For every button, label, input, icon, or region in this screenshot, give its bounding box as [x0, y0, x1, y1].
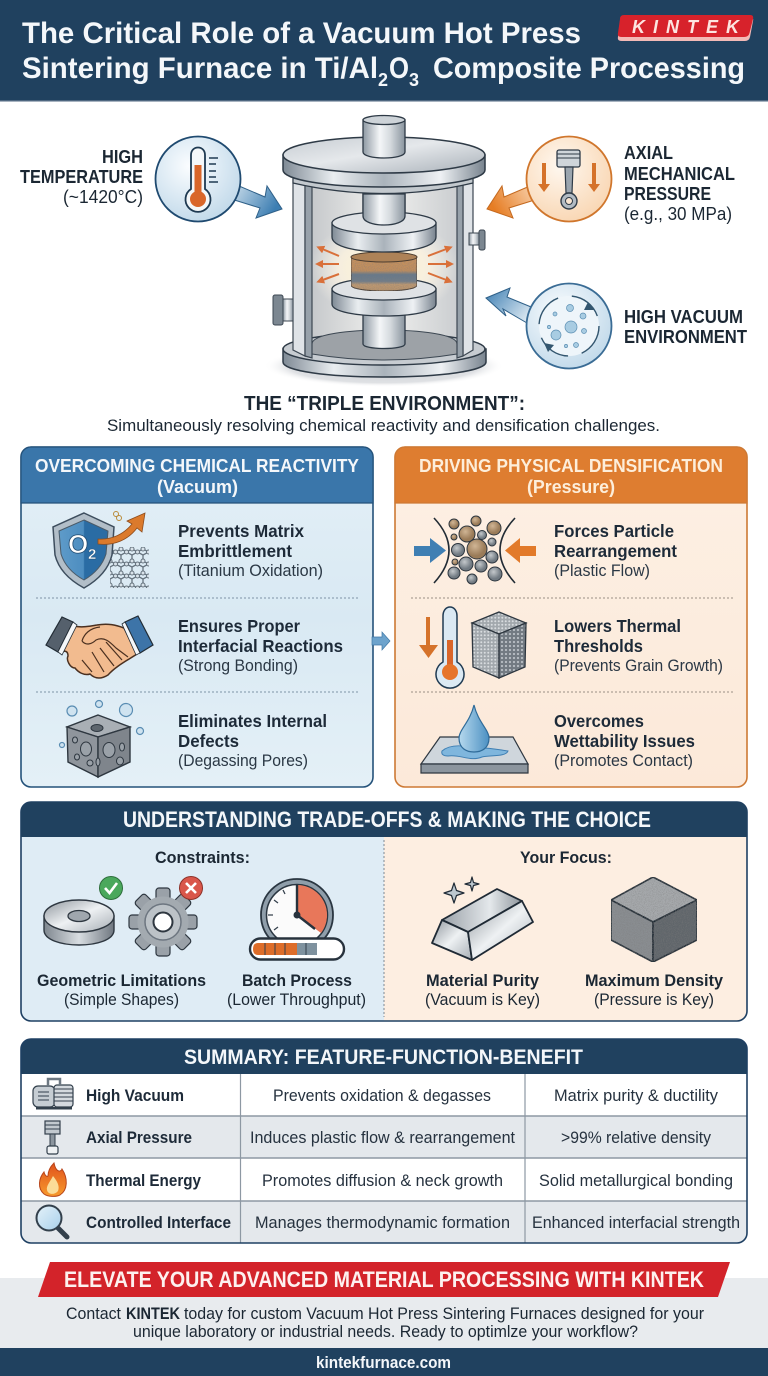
base plate	[283, 330, 486, 377]
table row: axial pressure	[86, 1128, 712, 1147]
title: 3	[409, 70, 419, 90]
label: axial mechanical pressure: AXIAL	[624, 142, 673, 163]
labels: trade-offs items: Geometric Limitations	[37, 971, 206, 990]
panel header: vacuum	[21, 447, 373, 503]
labels: trade-offs items: (Vacuum is Key)	[425, 990, 540, 1009]
title: The Critical Role of a Vacuum Hot Press	[22, 17, 581, 50]
labels: trade-offs items	[37, 971, 724, 1009]
footer: kintekfurnace.com	[316, 1354, 451, 1372]
table row: axial pressure: Axial Pressure	[86, 1128, 192, 1147]
labels: trade-offs items: (Lower Throughput)	[227, 990, 366, 1009]
label: high temperature: TEMPERATURE	[20, 166, 143, 187]
icon: water droplet	[421, 705, 528, 773]
contact text	[66, 1305, 704, 1341]
icon: shield and oxygen: O	[68, 529, 88, 559]
table row: controlled interface: Enhanced interfacial strength	[532, 1214, 740, 1232]
title: 2	[378, 70, 388, 90]
icon: shield and oxygen: 2	[88, 546, 96, 563]
label: high vacuum environment: ENVIRONMENT	[624, 326, 748, 347]
panel: chemical reactivity	[21, 447, 373, 787]
contact text: Contact	[66, 1305, 121, 1323]
heading: triple environment: THE “TRIPLE ENVIRONMENT”:	[244, 393, 525, 415]
text: wettability: (Promotes Contact)	[554, 751, 693, 770]
panel: physical densification	[395, 447, 747, 787]
contact text: unique laboratory or industrial needs. Ready to optimlze your workflow?	[133, 1323, 638, 1341]
text: wettability	[554, 711, 695, 770]
red banner: ELEVATE YOUR ADVANCED MATERIAL PROCESSING WITH KINTEK	[64, 1267, 704, 1292]
labels: trade-offs items: Batch Process	[242, 971, 352, 990]
subheading: your focus: Your Focus:	[520, 848, 612, 867]
text: internal defects: Eliminates Internal	[178, 711, 327, 731]
text: prevents embrittlement	[178, 521, 323, 580]
upper ram	[363, 194, 405, 224]
text: interfacial reactions	[178, 616, 343, 675]
text: wettability: Wettability Issues	[554, 731, 695, 751]
panel header: trade-offs: UNDERSTANDING TRADE-OFFS & MAKING THE CHOICE	[123, 807, 651, 832]
icon: thermometer	[156, 136, 240, 222]
icon: x badge	[180, 876, 202, 900]
panel header: pressure: DRIVING PHYSICAL DENSIFICATION	[419, 455, 723, 476]
icon: small piston	[45, 1121, 60, 1154]
glass chamber	[305, 182, 463, 347]
icon: particle rearrangement	[414, 516, 536, 584]
table row: axial pressure: Induces plastic flow & rearrangement	[250, 1129, 515, 1147]
side knobs	[273, 230, 485, 325]
text: interfacial reactions: (Strong Bonding)	[178, 656, 298, 675]
icon: handshake	[46, 616, 153, 678]
labels: trade-offs items: Material Purity	[426, 971, 540, 990]
table row: high vacuum: Prevents oxidation & degasses	[273, 1087, 491, 1105]
logo: KINTEK: KINTEK	[632, 17, 741, 37]
text: thermal thresholds: Thresholds	[554, 636, 643, 656]
heat glow	[309, 218, 459, 318]
lower ram	[363, 312, 405, 348]
labels: trade-offs items: (Simple Shapes)	[64, 990, 179, 1009]
labels: trade-offs items: Maximum Density	[585, 971, 724, 990]
label: axial mechanical pressure: PRESSURE	[624, 183, 711, 204]
text: particle rearrangement: Rearrangement	[554, 541, 677, 561]
text: thermal thresholds: Lowers Thermal	[554, 616, 681, 636]
panel header: pressure: (Pressure)	[527, 476, 615, 497]
logo: KINTEK	[618, 15, 753, 41]
icon: magnifying glass	[36, 1206, 67, 1237]
text: internal defects: (Degassing Pores)	[178, 751, 308, 770]
icon: thermometer and cube	[419, 607, 526, 688]
composite sample	[351, 252, 417, 291]
title	[22, 17, 745, 90]
heading: triple environment: Simultaneously resolving chemical reactivity and densification challenges.	[107, 416, 660, 435]
text: interfacial reactions: Interfacial Reactions	[178, 636, 343, 656]
arrow: between panels	[372, 632, 390, 650]
footer	[0, 1348, 768, 1376]
heading: triple environment	[107, 393, 660, 435]
title: O	[389, 52, 409, 85]
table row: high vacuum: High Vacuum	[86, 1086, 184, 1105]
label: high temperature: HIGH	[102, 146, 143, 167]
table row: axial pressure: >99% relative density	[561, 1129, 712, 1147]
text: internal defects	[178, 711, 327, 770]
icon: washer	[44, 900, 114, 945]
contact text: KINTEK	[126, 1305, 180, 1323]
arrow: temperature to furnace	[228, 183, 282, 218]
panel header: pressure	[395, 447, 747, 503]
table header	[21, 1039, 747, 1074]
table row: thermal energy: Promotes diffusion & neck growth	[262, 1172, 503, 1190]
table row: controlled interface	[86, 1213, 740, 1232]
text: interfacial reactions: Ensures Proper	[178, 616, 300, 636]
furnace illustration	[264, 116, 504, 387]
icon: check badge	[100, 876, 122, 900]
contact text: today for custom Vacuum Hot Press Sintering Furnaces designed for your	[184, 1305, 704, 1323]
text: particle rearrangement	[554, 521, 677, 580]
label: high vacuum environment	[624, 306, 748, 347]
text: prevents embrittlement: Prevents Matrix	[178, 521, 304, 541]
heat arrows	[319, 248, 450, 281]
text: prevents embrittlement: Embrittlement	[178, 541, 292, 561]
table row: controlled interface: Manages thermodynamic formation	[255, 1214, 510, 1232]
table row: controlled interface: Controlled Interface	[86, 1213, 231, 1232]
header banner	[0, 0, 768, 102]
text: thermal thresholds: (Prevents Grain Growth)	[554, 656, 723, 675]
icon: vacuum particles	[526, 284, 612, 368]
icon: flame	[39, 1163, 66, 1196]
icon: metal ingot	[432, 877, 533, 960]
label: axial mechanical pressure: (e.g., 30 MPa)	[624, 204, 732, 224]
arrow: pressure to furnace	[487, 183, 541, 218]
lower platen	[332, 278, 436, 316]
label: high temperature: (~1420°C)	[63, 187, 143, 207]
table row: high vacuum: Matrix purity & ductility	[554, 1087, 719, 1105]
chamber pillars	[293, 180, 473, 358]
table row: thermal energy: Thermal Energy	[86, 1171, 201, 1190]
table row: thermal energy	[86, 1171, 733, 1190]
text: particle rearrangement: Forces Particle	[554, 521, 674, 541]
text: particle rearrangement: (Plastic Flow)	[554, 561, 650, 580]
label: axial mechanical pressure: MECHANICAL	[624, 163, 735, 184]
call to action band	[0, 1262, 768, 1349]
label: high temperature	[20, 146, 143, 207]
text: thermal thresholds	[554, 616, 723, 675]
label: axial mechanical pressure	[624, 142, 735, 224]
upper platen	[332, 194, 436, 252]
icon: piston	[526, 136, 612, 222]
text: internal defects: Defects	[178, 731, 239, 751]
table row: high vacuum	[86, 1086, 719, 1105]
panel header: vacuum: (Vacuum)	[157, 476, 238, 497]
labels: trade-offs items: (Pressure is Key)	[594, 990, 714, 1009]
table header: SUMMARY: FEATURE-FUNCTION-BENEFIT	[184, 1046, 583, 1069]
icon: dense cube	[611, 877, 697, 962]
text: wettability: Overcomes	[554, 711, 644, 731]
icon: gear	[129, 888, 197, 956]
table row: thermal energy: Solid metallurgical bonding	[539, 1172, 733, 1190]
icon: shield and oxygen	[53, 512, 149, 588]
panel header: vacuum: OVERCOMING CHEMICAL REACTIVITY	[35, 455, 360, 476]
icon: gauge with progress bar	[250, 879, 344, 960]
icon: vacuum pump	[33, 1079, 73, 1110]
icon: porous cube	[60, 700, 144, 777]
title: Composite Processing	[433, 52, 745, 85]
red banner	[38, 1262, 730, 1297]
panel: trade-offs	[21, 802, 747, 1021]
label: high vacuum environment: HIGH VACUUM	[624, 306, 743, 327]
text: prevents embrittlement: (Titanium Oxidation)	[178, 561, 323, 580]
title: Sintering Furnace in Ti/Al	[22, 52, 378, 85]
subheading: constraints: Constraints:	[155, 848, 250, 867]
panel header: trade-offs	[21, 802, 747, 837]
arrow: vacuum to furnace	[486, 288, 536, 323]
panel: summary table	[21, 1039, 747, 1243]
top plate	[283, 116, 485, 194]
